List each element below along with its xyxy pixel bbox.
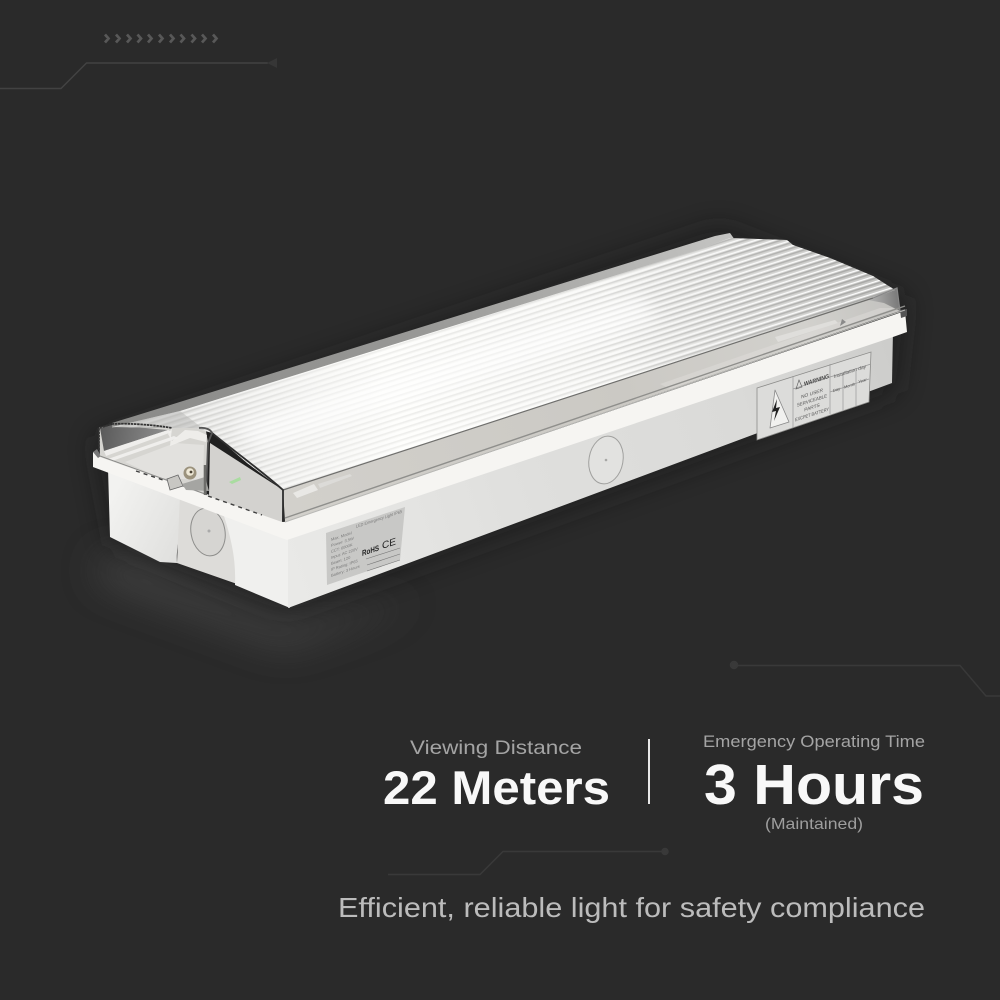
warning label: Installation day [834,364,867,380]
warning label: NO USER [801,387,823,400]
maintained note: (Maintained) [765,816,863,833]
rating label: CE [382,537,396,552]
body: long front face [288,330,893,608]
left end shade on ribs [112,411,205,430]
right circuit line decoration [730,662,1000,696]
left end pane right of hinge [209,443,283,522]
top-left circuit line decoration [0,34,277,88]
viewing distance value: 22 Meters [383,761,610,814]
rating label: CCT: 6000K [331,542,353,554]
peak joint reflection [168,428,207,446]
back grey band [112,233,735,428]
clear cover: left end compartment [99,425,282,522]
warning label: EXCPET BATTERY [795,406,830,423]
cover outlines [283,298,873,490]
rating label: Beam: 120 [331,555,351,566]
operating time value: 3 Hours [704,753,924,817]
lighter band right section [660,308,895,389]
base rim [93,311,907,540]
rating label [326,507,405,585]
rating label: IP Rating: IP65 [331,558,358,572]
end glass pane right [868,288,900,311]
warning label: Year [858,377,867,384]
clear front band [283,288,900,522]
rating label: Input: AC 220V [331,546,358,560]
knockout on front face [585,433,627,487]
warning label: WARNING [804,373,829,388]
floor glow under lamp [95,555,420,645]
green indicator [229,477,241,484]
rim top lines [285,306,905,518]
interior lighter floor [125,443,204,480]
hinge screw hardware [167,465,209,495]
rating label: LED Emergency Light IP65 [356,509,402,529]
operating time label: Emergency Operating Time [703,732,925,751]
warning label: Month [844,381,856,390]
tagline: Efficient, reliable light for safety compliance [338,892,925,923]
rim corner left [93,449,101,458]
ribbed diffuser top [112,238,895,490]
divider [648,739,650,804]
clear cover: dark left pane [100,425,168,451]
product: emergency light fitting [93,233,907,608]
viewing distance label: Viewing Distance [410,737,582,759]
body: left end block [108,468,190,563]
rim slot dashes [136,471,262,515]
chevron row [105,34,216,42]
small clip tab front left [293,484,318,498]
small arrow mark right [840,319,846,326]
body: recess with knockout [177,495,240,585]
rating label: Max. Model [331,530,352,542]
rating label: Power: 3.5W [331,536,354,548]
rating label: RoHS [362,543,379,558]
warning label: SERVICEABLE [797,393,828,409]
warning label: PARTS [804,402,820,413]
warning label [757,352,871,440]
bottom circuit line decoration [388,848,668,874]
body: end shoulder [222,510,290,608]
diffuser highlight [230,295,660,450]
warning label: Day [833,386,841,393]
rating label: Battery: 3 Hours [331,564,360,578]
rim corner right [900,309,907,318]
lamp shadow [95,228,905,612]
clear cover: light reflection strips [104,430,178,461]
